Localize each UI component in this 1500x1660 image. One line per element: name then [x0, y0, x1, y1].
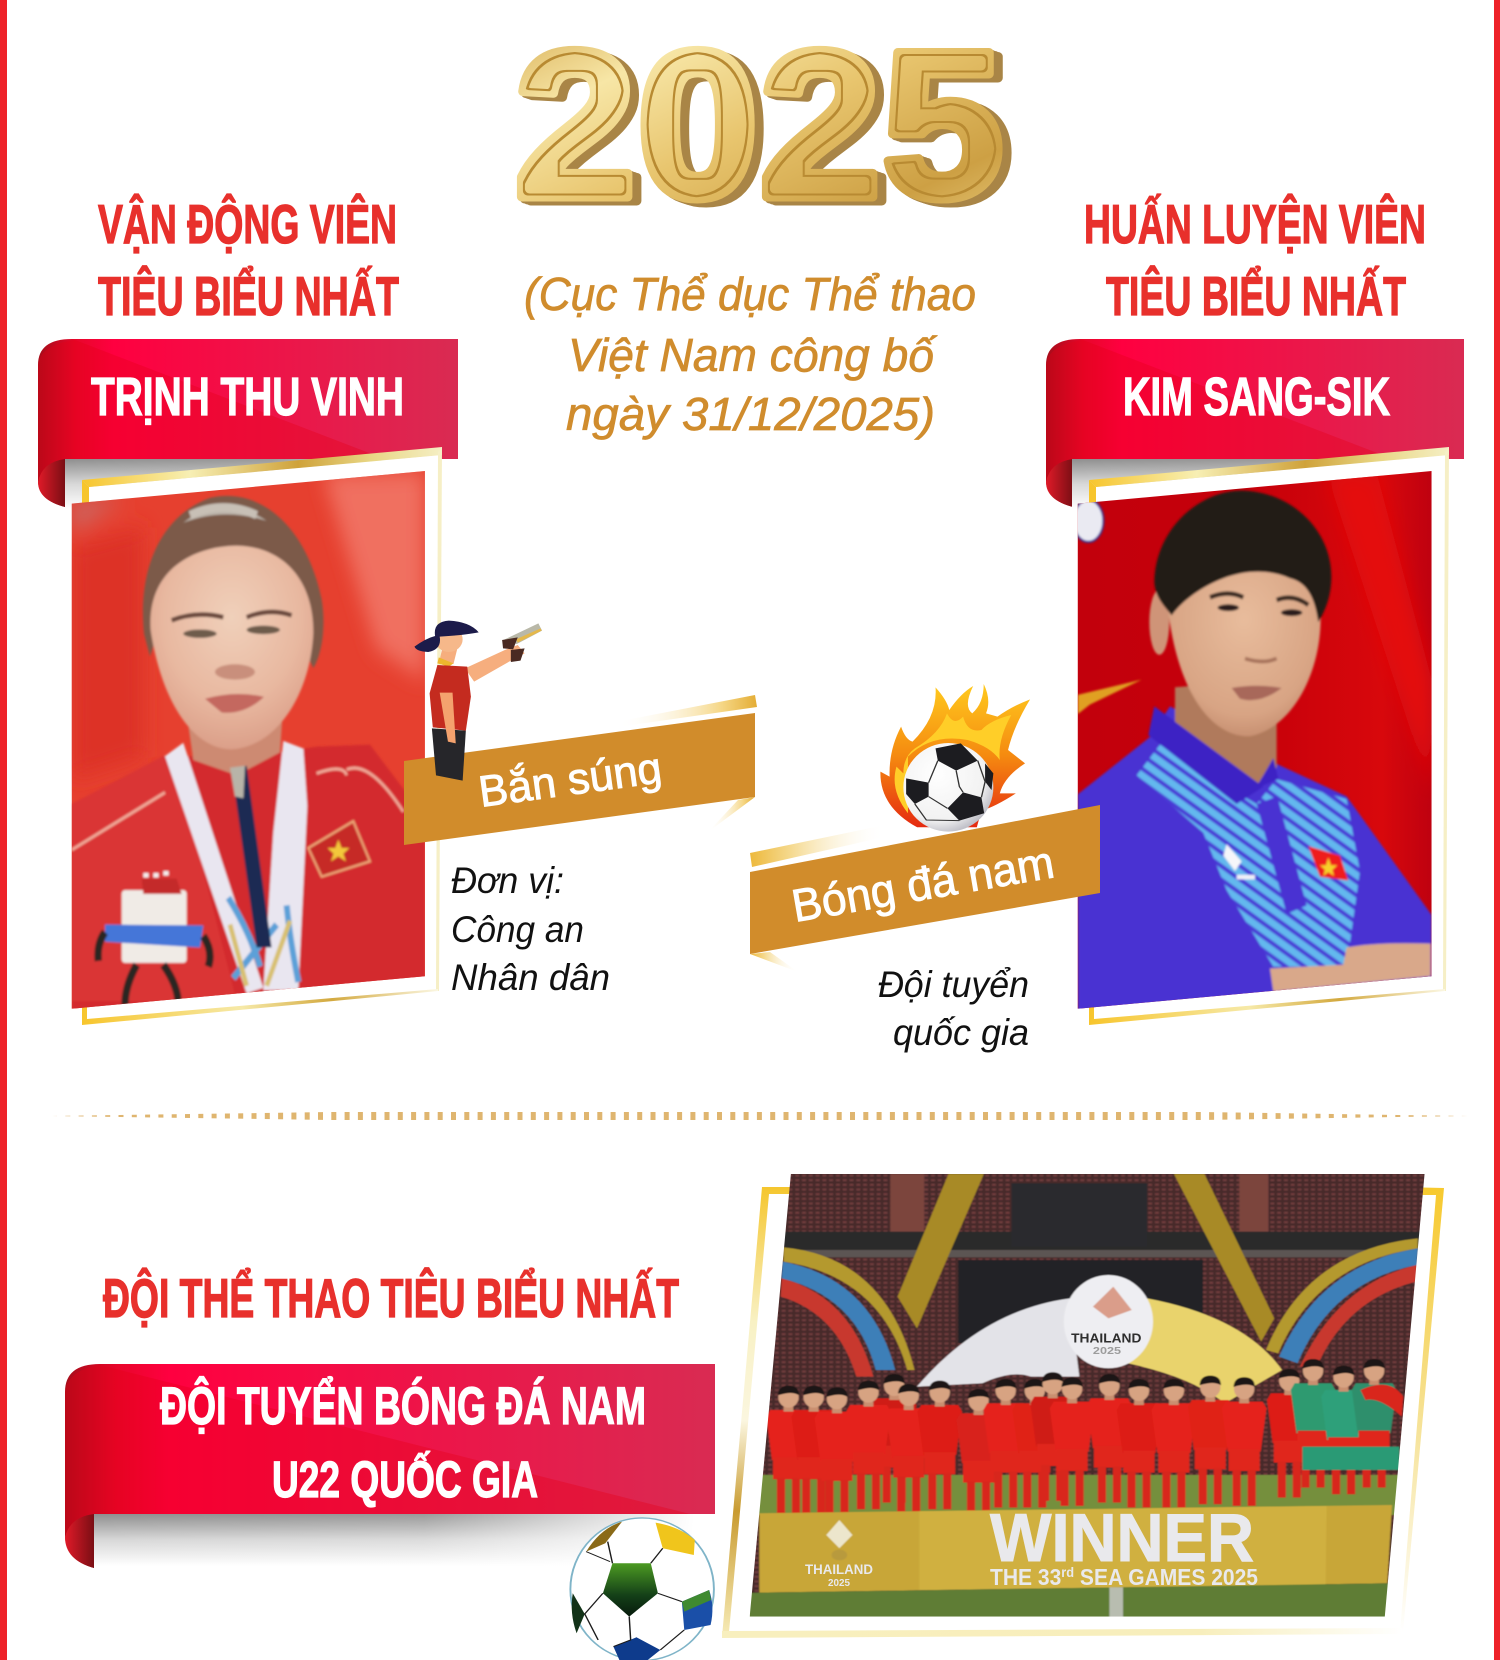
text: unit of athlete	[451, 860, 610, 998]
banner: U22 men's national team: U22 QUỐC GIA	[272, 1450, 538, 1508]
icon: flaming football	[880, 684, 1030, 832]
banner: coach name	[1046, 339, 1464, 507]
photo: team celebrating at SEA Games: 2025	[1093, 1345, 1121, 1356]
text: national team note: quốc gia	[893, 1012, 1029, 1053]
title: 2025 gold numerals: 2025	[514, 7, 1004, 242]
heading: best coach	[1084, 193, 1426, 327]
text: unit of athlete: Đơn vị:	[451, 860, 564, 901]
ribbon: men's football: Bóng đá nam	[788, 836, 1058, 932]
banner text: WINNER: 2025	[828, 1578, 850, 1589]
banner text: WINNER: WINNER	[990, 1500, 1254, 1576]
photo frame: athlete	[65, 447, 442, 1025]
subtitle: announcement note: Việt Nam công bố	[568, 329, 937, 381]
banner text: WINNER: rd	[1061, 1564, 1074, 1580]
ribbon: shooting	[404, 695, 757, 845]
panel: athlete	[38, 339, 458, 1025]
heading: best sports team: ĐỘI THỂ THAO TIÊU BIỂU NHẤT	[103, 1267, 679, 1329]
text: national team note: Đội tuyển	[878, 964, 1029, 1005]
icon: shooter figure	[414, 621, 542, 781]
subtitle: announcement note: (Cục Thể dục Thể thao	[524, 268, 976, 320]
banner text: WINNER: SEA GAMES 2025	[1074, 1564, 1258, 1590]
banner: coach name: KIM SANG-SIK	[1123, 367, 1390, 427]
panel: team photo	[722, 1170, 1444, 1638]
banner: athlete name	[38, 339, 458, 507]
banner: U22 men's national team: ĐỘI TUYỂN BÓNG ĐÁ NAM	[160, 1375, 646, 1436]
banner text: WINNER	[805, 1500, 1258, 1590]
photo frame: coach	[1072, 447, 1449, 1025]
ribbon: shooting: Bắn súng	[476, 743, 665, 817]
heading: best athlete	[98, 193, 399, 327]
heading: best athlete: TIÊU BIỂU NHẤT	[98, 265, 399, 327]
left red border	[0, 0, 7, 1660]
photo frame: team	[722, 1187, 1444, 1638]
text: unit of athlete: Công an	[451, 909, 584, 950]
photo: Trịnh Thu Vinh portrait	[67, 465, 430, 1016]
text: unit of athlete: Nhân dân	[451, 957, 610, 998]
photo: Kim Sang-sik portrait	[1073, 465, 1437, 1016]
subtitle: announcement note: ngày 31/12/2025)	[566, 388, 935, 440]
banner text: WINNER: THAILAND	[805, 1561, 873, 1577]
panel: coach	[1046, 339, 1464, 1025]
icon: colourful football	[570, 1518, 714, 1660]
photo: team celebrating at SEA Games	[740, 1170, 1428, 1620]
banner: athlete name: TRỊNH THU VINH	[91, 367, 404, 427]
text: national team note	[878, 964, 1029, 1053]
heading: best athlete: VẬN ĐỘNG VIÊN	[98, 193, 397, 255]
right red border	[1494, 0, 1500, 1660]
subtitle: announcement note	[524, 268, 976, 440]
photo: team celebrating at SEA Games: THAILAND	[1071, 1332, 1141, 1346]
banner text: WINNER: THE 33	[990, 1564, 1068, 1590]
ribbon: men's football	[750, 805, 1100, 972]
banner: U22 men's national team	[65, 1364, 715, 1568]
